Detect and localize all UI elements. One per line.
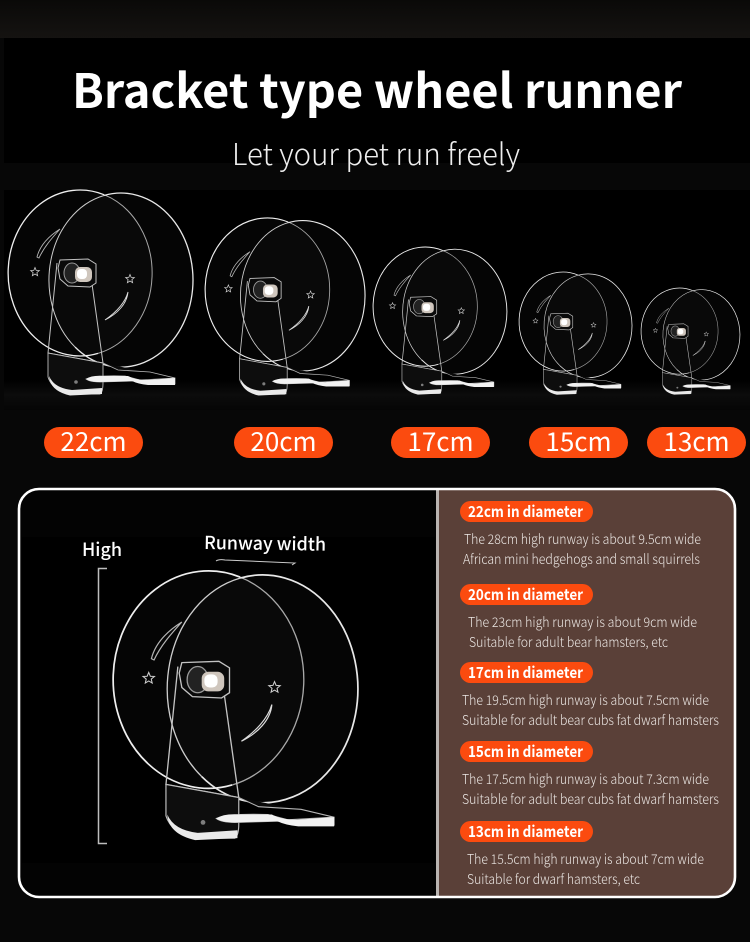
wheel 13cm	[641, 288, 740, 395]
title: Bracket type wheel runner	[72, 53, 682, 122]
size label: 20cm	[234, 422, 333, 459]
size label: 20cm: 20cm	[250, 422, 317, 459]
spec: 22cm: The 28cm high runway is about 9.5cm wide	[464, 528, 701, 548]
spec: 13cm: 13cm in diameter	[468, 820, 583, 842]
panel: wheel size line-up	[4, 190, 750, 410]
size label: 17cm: 17cm	[407, 422, 474, 459]
spec: 13cm: Suitable for dwarf hamsters, etc	[467, 868, 640, 888]
spec: 17cm: The 19.5cm high runway is about 7.5cm wide	[462, 689, 709, 709]
spec: 20cm: 20cm in diameter	[468, 583, 583, 605]
size label: 17cm	[391, 422, 490, 459]
size label: 13cm	[647, 422, 746, 459]
size label: 13cm: 13cm	[663, 422, 730, 459]
size label: 15cm: 15cm	[545, 422, 612, 459]
spec: 22cm: African mini hedgehogs and small squirrels	[463, 548, 700, 568]
spec: 13cm	[460, 820, 704, 888]
wheel 20cm	[205, 218, 365, 396]
spec: 15cm	[460, 740, 719, 808]
height bracket	[98, 568, 107, 844]
size label: 22cm: 22cm	[60, 422, 127, 459]
top photo strip	[0, 0, 750, 163]
spec: 15cm: Suitable for adult bear cubs fat dwarf hamsters	[462, 788, 719, 808]
spec: 20cm	[460, 583, 697, 651]
size label: 15cm	[529, 422, 628, 459]
wheel 15cm	[519, 272, 632, 395]
runway width marker	[216, 560, 295, 565]
runway width label: Runway width	[204, 529, 326, 557]
size label: 22cm	[44, 422, 143, 459]
spec: 15cm: The 17.5cm high runway is about 7.3cm wide	[462, 768, 709, 788]
subtitle: Let your pet run freely	[232, 130, 520, 174]
height label: High	[82, 536, 122, 562]
spec: 22cm	[460, 500, 701, 568]
spec: 20cm: Suitable for adult bear hamsters, etc	[469, 631, 668, 651]
panel: dimensions and specifications	[19, 489, 735, 897]
spec: 17cm: 17cm in diameter	[468, 661, 583, 683]
large wheel photo	[113, 571, 358, 840]
spec: 17cm	[460, 661, 719, 729]
spec: 20cm: The 23cm high runway is about 9cm wide	[468, 611, 697, 631]
spec: 15cm: 15cm in diameter	[468, 740, 583, 762]
wheel 22cm	[8, 190, 193, 396]
spec: 22cm: 22cm in diameter	[468, 500, 583, 522]
spec: 13cm: The 15.5cm high runway is about 7cm wide	[467, 848, 704, 868]
wheel 17cm	[373, 247, 507, 395]
spec: 17cm: Suitable for adult bear cubs fat dwarf hamsters	[462, 709, 719, 729]
